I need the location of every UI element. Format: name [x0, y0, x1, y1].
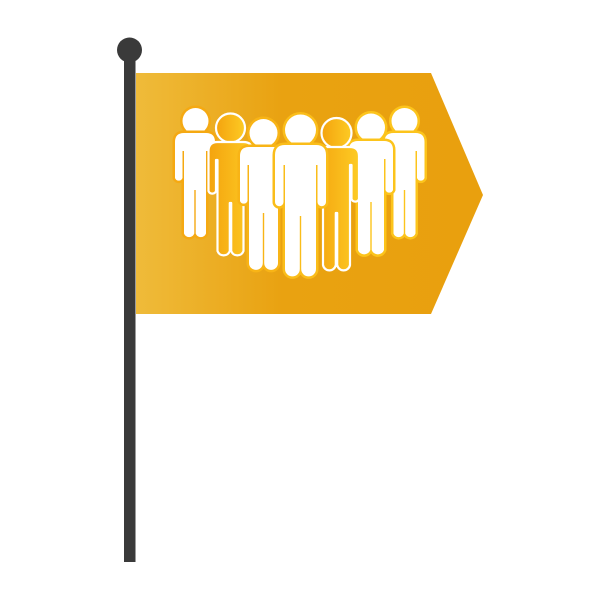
person 2	[208, 114, 252, 255]
person 6	[349, 114, 393, 254]
pole ball finial	[117, 38, 142, 62]
person 1	[175, 108, 215, 237]
person 4	[275, 114, 326, 276]
group of people icon	[175, 108, 424, 276]
person 3	[240, 119, 287, 270]
arrow-shaped flag banner	[136, 73, 483, 314]
flag pole	[124, 50, 136, 562]
person 7	[384, 108, 424, 237]
person 5	[314, 118, 359, 270]
